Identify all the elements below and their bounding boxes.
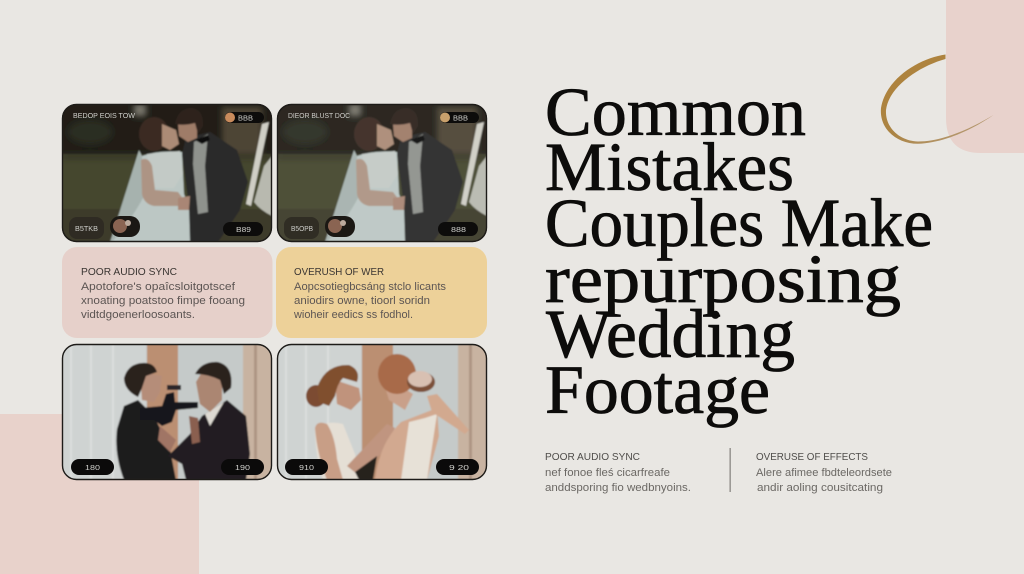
card body text: xnoating poatstoo fimpe fooang (81, 295, 245, 307)
title: Footage (545, 352, 770, 428)
right woman (375, 408, 439, 480)
right badge (436, 459, 479, 475)
bottom right badge: 888 (451, 227, 466, 234)
photo: two women (277, 344, 487, 480)
title (545, 74, 933, 428)
right badge: 9 20 (449, 465, 469, 472)
bottom right badge: B89 (236, 227, 251, 234)
top badge: BBB (238, 116, 253, 122)
card body text: vidtdgoenerloosoants. (81, 309, 195, 321)
footer note: overuse of effects: OVERUSE OF EFFECTS (756, 451, 868, 463)
decorative pink block bottom left (0, 414, 199, 574)
footer note: poor audio sync: nef fonoe fleś cicarfreafe (545, 467, 670, 479)
photo: couple, after (277, 104, 487, 242)
footer note: overuse of effects (756, 451, 892, 494)
footer note: poor audio sync: POOR AUDIO SYNC (545, 451, 640, 463)
left woman (315, 423, 361, 480)
photo: two men with camera (62, 344, 272, 480)
title: Wedding (546, 296, 795, 372)
right badge (221, 459, 264, 475)
top badge (225, 112, 264, 123)
photo caption: BEDOP EOIS TOW (73, 113, 135, 120)
title: Mistakes (545, 129, 794, 205)
right man (168, 400, 250, 480)
card heading: OVERUSH OF WER (294, 266, 384, 278)
bottom left badge: B5OPB (291, 226, 313, 233)
gold brush curve (881, 54, 994, 144)
bottom left badge (284, 217, 319, 239)
top badge (440, 112, 479, 123)
footer note: poor audio sync: anddsporing fio wedbnyoins. (545, 482, 691, 494)
card: poor audio sync (62, 247, 272, 338)
bottom right badge (438, 222, 478, 236)
footer note: overuse of effects: andir aoling cousitcating (757, 482, 883, 494)
bottom right badge (223, 222, 263, 236)
card: overuse (276, 247, 487, 338)
left badge: 180 (85, 465, 100, 472)
card body text: Aopcsotiegbcsáng stclo licants (294, 281, 446, 293)
footer note: overuse of effects: Alere afimee fbdteleordsete (756, 467, 892, 479)
bottom left badge (69, 217, 104, 239)
title: Common (545, 74, 806, 150)
card body text: wioheir eedics ss fodhol. (293, 309, 413, 321)
thumbnail badge (325, 216, 355, 237)
left badge (285, 459, 328, 475)
top badge: BBB (453, 116, 468, 122)
footer note: poor audio sync (545, 451, 691, 494)
card body text: aniodirs owne, tioorl soridn (294, 295, 430, 307)
thumbnail badge (110, 216, 140, 237)
decorative pink block top right (946, 0, 1024, 153)
card body text (81, 281, 245, 321)
photo: couple, before (62, 104, 272, 242)
right badge: 190 (235, 465, 250, 472)
left badge: 910 (299, 465, 314, 472)
card heading: POOR AUDIO SYNC (81, 266, 177, 278)
card body text: Apotofore's opaîcsloitgotscef (81, 281, 236, 293)
card body text (293, 281, 446, 321)
hands (158, 426, 176, 452)
left badge (71, 459, 114, 475)
bottom left badge: B5TKB (75, 226, 98, 233)
title: Couples Make (545, 185, 933, 261)
camera (140, 392, 198, 426)
left man (116, 400, 176, 480)
title: repurposing (545, 241, 901, 317)
photo caption: DIEOR BLUST DOC (288, 113, 350, 120)
